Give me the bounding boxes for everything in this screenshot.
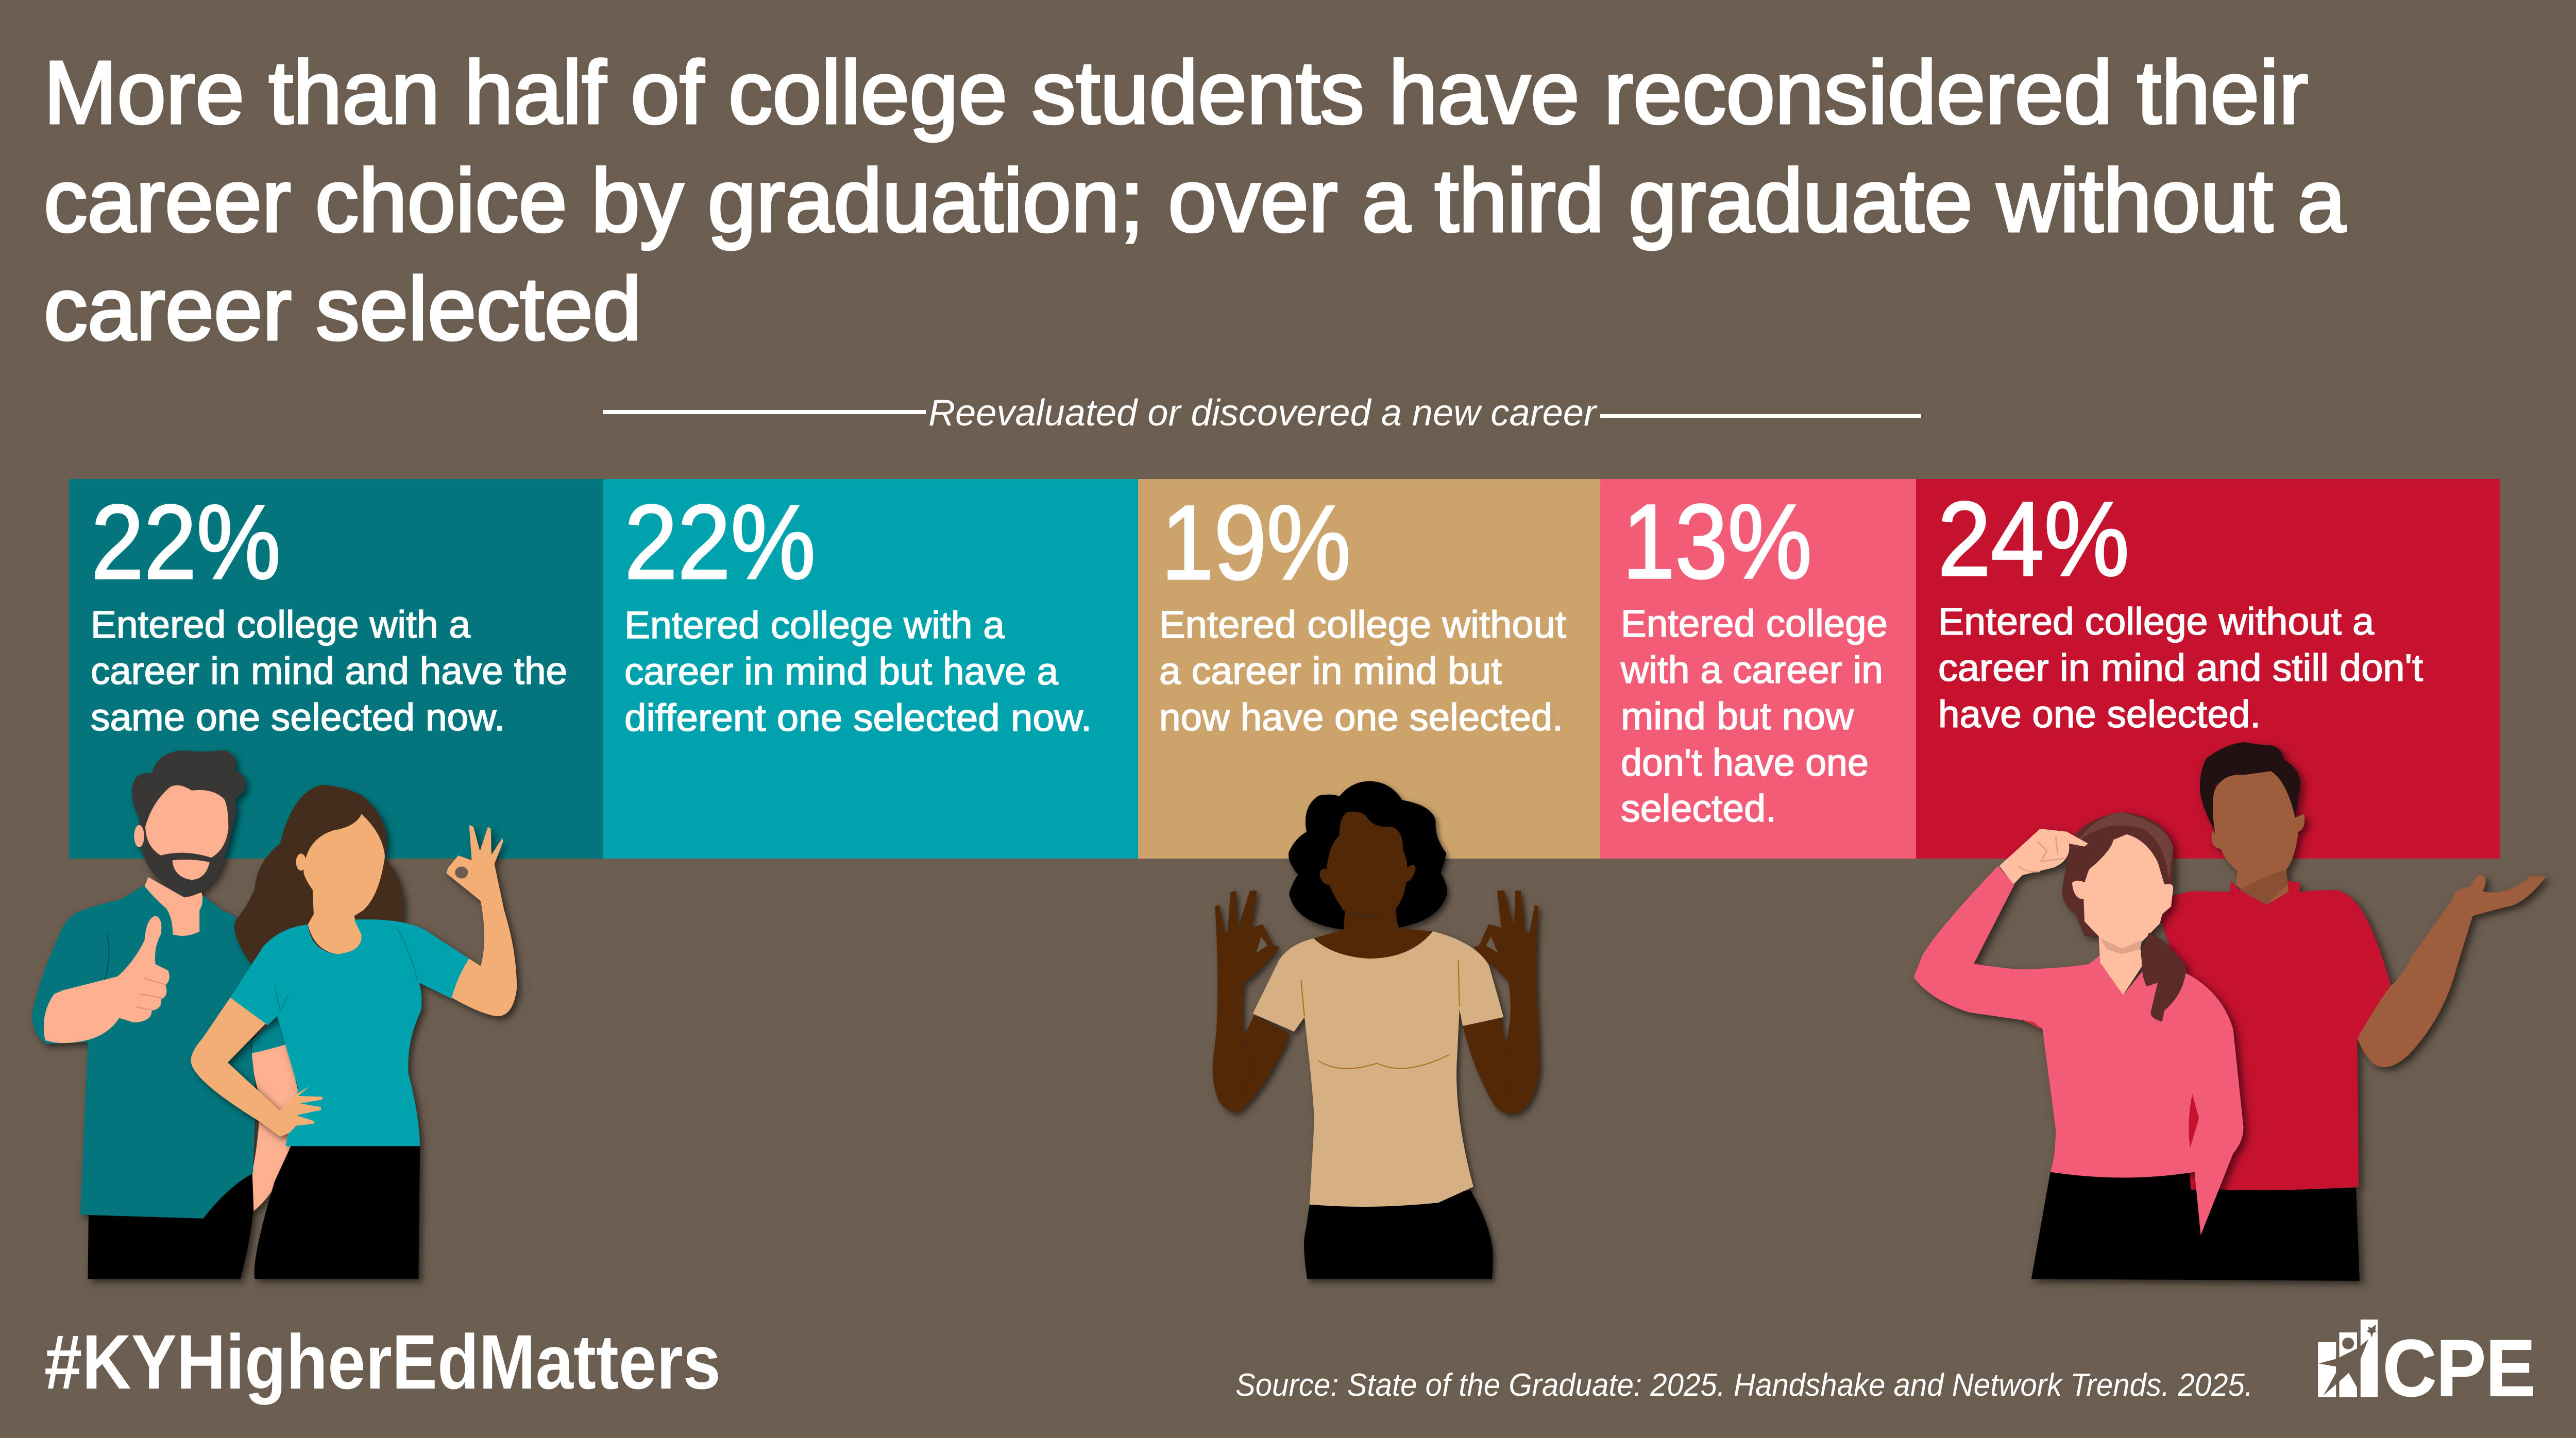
panel: 19% now selected (1138, 479, 1600, 859)
title (44, 42, 2346, 358)
title: More than half of college students have reconsidered their (44, 42, 2308, 142)
logo: CPE (2318, 1320, 2535, 1413)
right arm and hand (1463, 891, 1540, 1114)
panel: 19% now selected: a career in mind but (1159, 649, 1502, 692)
hair (1289, 781, 1447, 930)
source note: Source: State of the Graduate: 2025. Handshake and Network Trends. 2025. (1235, 1367, 2253, 1403)
panel: 22% different career: 22% (624, 483, 816, 601)
panel: 13% no longer selected: mind but now (1621, 695, 1854, 738)
panel: 13% no longer selected: with a career in (1620, 648, 1883, 691)
illustration: man and woman giving thumbs up and OK sign (32, 750, 517, 1279)
illustration: woman scratching head and man shrugging (1914, 742, 2546, 1281)
man figure (32, 750, 300, 1279)
panel: 13% no longer selected (1600, 479, 1916, 859)
panel: 22% same career: career in mind and have the (91, 649, 567, 692)
panel: 13% no longer selected: Entered college (1621, 602, 1888, 645)
woman figure (191, 785, 517, 1279)
panel: 19% now selected: 19% (1161, 484, 1351, 602)
panel: 22% different career (603, 479, 1138, 859)
panel: 22% same career: 22% (91, 483, 281, 601)
logo mark (2318, 1320, 2378, 1397)
bracket label: reevaluated or discovered a new career: Reevaluated or discovered a new career (928, 392, 1598, 434)
bracket label: reevaluated or discovered a new career (603, 392, 1921, 434)
panel: 22% different career: different one selected now. (624, 696, 1092, 739)
man figure (2031, 742, 2546, 1281)
woman figure (1914, 812, 2243, 1235)
title: career selected (44, 259, 641, 358)
panel: 24% still undecided: have one selected. (1938, 693, 2261, 735)
panel: 24% still undecided (1916, 479, 2500, 859)
panel: 22% same career: same one selected now. (91, 696, 505, 739)
hashtag: #KYHigherEdMatters (44, 1319, 721, 1405)
title: career choice by graduation; over a third graduate without a (44, 150, 2346, 250)
panel: 24% still undecided: 24% (1938, 480, 2129, 598)
panel: 22% different career: career in mind but have a (624, 650, 1059, 693)
panel: 24% still undecided: Entered college without a (1938, 600, 2375, 643)
illustration: woman giving two OK signs (1213, 781, 1540, 1279)
panel: 19% now selected: Entered college without (1159, 603, 1566, 646)
panel: 13% no longer selected: don't have one (1621, 741, 1869, 784)
panel: 13% no longer selected: selected. (1621, 787, 1776, 830)
head and neck (1314, 812, 1433, 958)
panel: 22% same career (69, 479, 603, 859)
shirt (1253, 931, 1503, 1207)
panel: 19% now selected: now have one selected. (1159, 696, 1563, 739)
logo: CPE: CPE (2383, 1324, 2535, 1413)
pants (1304, 1190, 1493, 1279)
left arm and hand (1213, 891, 1291, 1112)
panel: 22% same career: Entered college with a (91, 603, 471, 646)
panel: 13% no longer selected: 13% (1622, 483, 1812, 601)
panel: 24% still undecided: career in mind and still don't (1938, 646, 2423, 689)
panel: 22% different career: Entered college with a (624, 604, 1005, 646)
